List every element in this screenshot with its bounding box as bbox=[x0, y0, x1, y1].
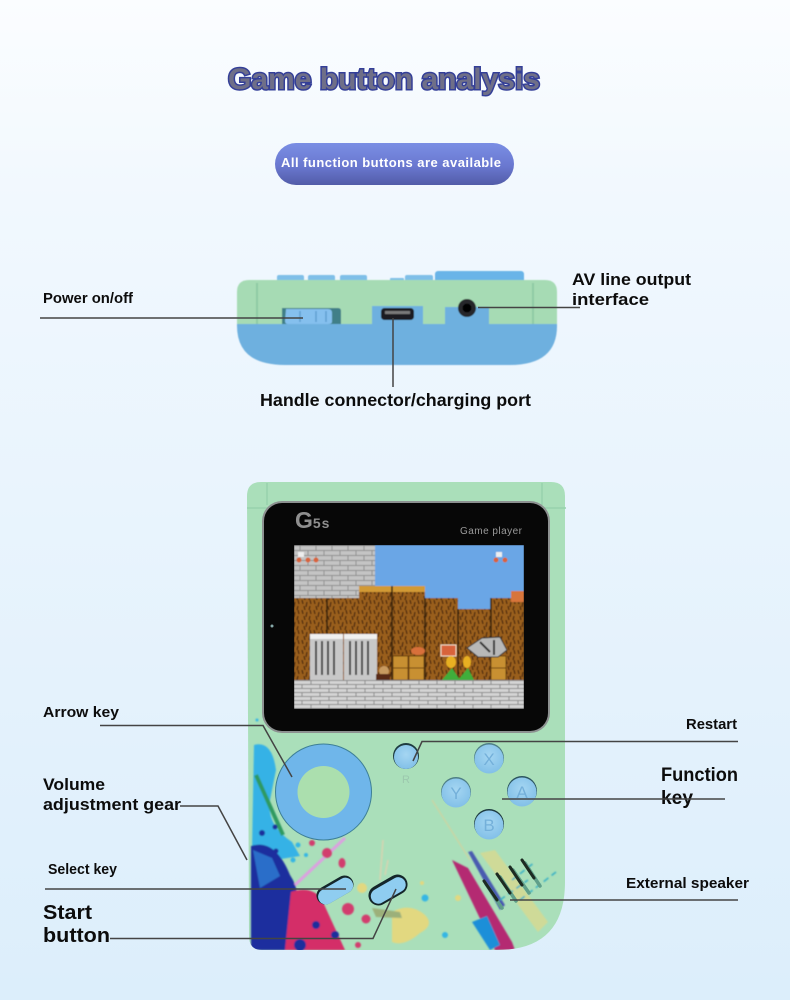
label: restart: Restart bbox=[686, 717, 737, 733]
device: side view bbox=[237, 271, 557, 365]
shell bbox=[247, 482, 565, 950]
screen bbox=[262, 501, 550, 733]
right brush stroke bbox=[480, 850, 548, 932]
label: start button: button bbox=[43, 924, 110, 947]
robot enemy bbox=[467, 637, 507, 657]
X button: X bbox=[483, 750, 495, 769]
logo: G5s: G5s bbox=[295, 507, 330, 533]
label: start button: Start bbox=[43, 901, 92, 924]
green shell bbox=[237, 280, 557, 326]
R button: R bbox=[402, 774, 410, 786]
paint splatter bbox=[251, 718, 556, 951]
label: AV output: AV line output bbox=[572, 270, 691, 289]
fence bbox=[294, 586, 524, 682]
label: arrow key: Arrow key bbox=[43, 704, 120, 721]
trash cans bbox=[310, 634, 377, 680]
game scene bbox=[294, 545, 524, 709]
speaker grille bbox=[484, 860, 540, 908]
red box bbox=[441, 645, 456, 656]
X button bbox=[474, 743, 504, 774]
label: function key: Function bbox=[661, 764, 738, 786]
label: arrow key bbox=[43, 704, 292, 777]
text: Game player: Game player bbox=[460, 526, 523, 537]
characters bbox=[376, 647, 425, 680]
flowers bbox=[442, 656, 474, 680]
R button bbox=[393, 743, 419, 786]
label: power on/off: Power on/off bbox=[43, 291, 133, 307]
B button: B bbox=[483, 816, 495, 835]
top buttons bbox=[277, 271, 524, 283]
label: start button bbox=[43, 889, 396, 947]
label: restart bbox=[413, 717, 738, 761]
badge: all function buttons bbox=[275, 143, 514, 185]
hud icons bbox=[296, 558, 508, 562]
device: front view bbox=[247, 482, 566, 951]
select button bbox=[313, 872, 357, 908]
label: select key: Select key bbox=[48, 862, 117, 878]
joystick bbox=[276, 744, 372, 840]
blue shell bbox=[237, 306, 557, 365]
label: volume gear: adjustment gear bbox=[43, 795, 181, 814]
Y button: Y bbox=[450, 784, 462, 803]
A button bbox=[507, 776, 537, 806]
micro USB port bbox=[381, 308, 414, 320]
label: charging port: Handle connector/charging port bbox=[260, 390, 531, 410]
title: Game button analysis bbox=[228, 63, 540, 96]
yellow splash bbox=[392, 908, 429, 943]
label: AV output bbox=[478, 270, 691, 309]
AV jack bbox=[458, 299, 476, 317]
label: volume gear: Volume bbox=[43, 775, 105, 794]
crates bbox=[393, 656, 506, 680]
A button: A bbox=[516, 783, 528, 802]
label: function key bbox=[502, 764, 738, 809]
start button bbox=[365, 871, 411, 909]
B button bbox=[474, 809, 504, 840]
Y button bbox=[441, 777, 471, 808]
label: AV output: interface bbox=[572, 290, 649, 309]
pavement bbox=[294, 680, 524, 709]
label: volume gear bbox=[43, 775, 247, 860]
label: function key: key bbox=[661, 787, 693, 809]
power switch bbox=[282, 308, 341, 324]
label: external speaker: External speaker bbox=[626, 876, 749, 892]
badge: all function buttons: All function buttons are available bbox=[281, 155, 501, 170]
